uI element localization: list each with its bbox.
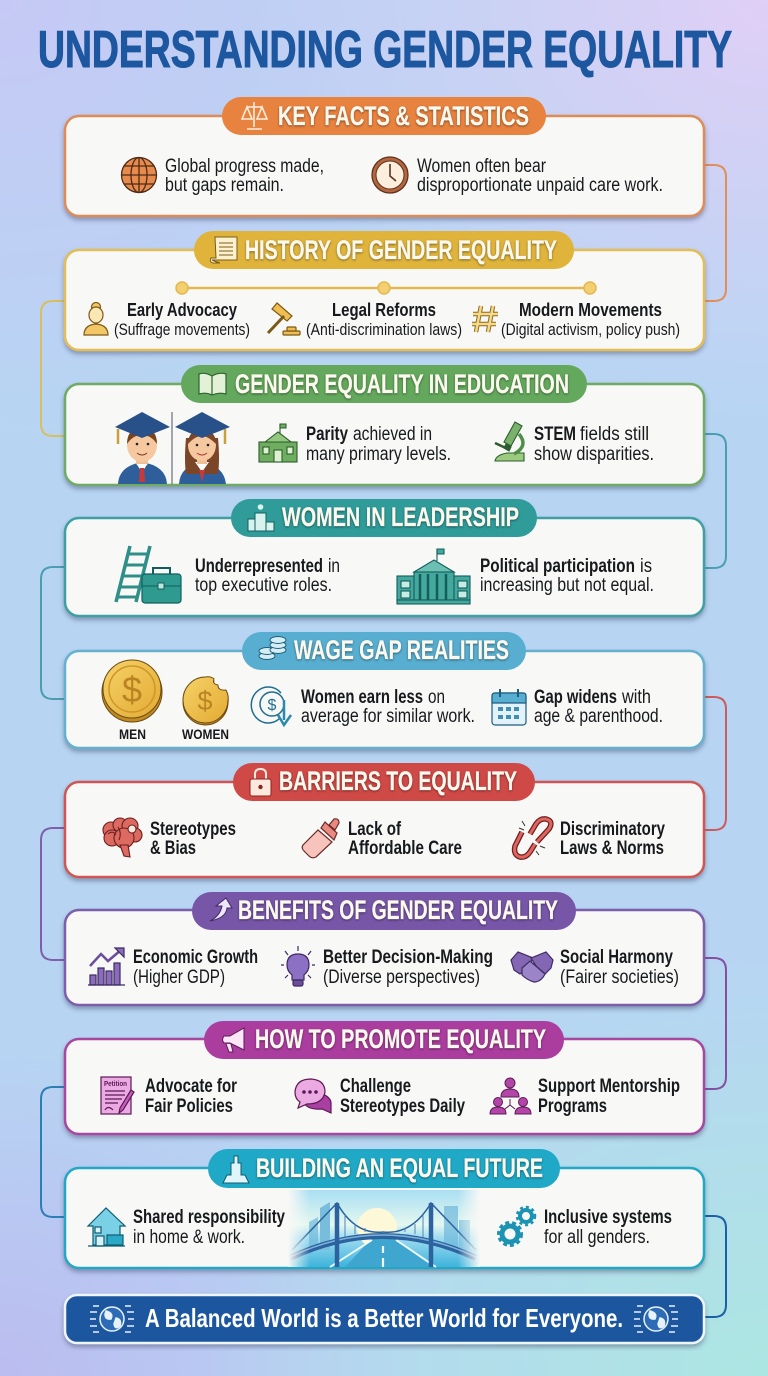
text: mentorship: Support Mentorship [538, 1076, 680, 1097]
heading pill: history: HISTORY OF GENDER EQUALITY [245, 235, 557, 265]
panel: barriers [65, 763, 704, 877]
text: mentorship [538, 1076, 680, 1117]
text: gap widens [534, 687, 663, 727]
text: challenge: Stereotypes Daily [340, 1096, 465, 1117]
text: women earn less: average for similar work. [301, 706, 475, 727]
heading pill: promote: HOW TO PROMOTE EQUALITY [255, 1024, 546, 1054]
text: gap widens: age & parenthood. [534, 706, 663, 727]
heading pill: key facts [222, 97, 546, 135]
text: legal reforms: (Anti-discrimination laws) [306, 320, 462, 339]
text: social harmony: (Fairer societies) [560, 967, 679, 988]
text: inclusive systems [544, 1207, 672, 1248]
text: discriminatory [560, 819, 665, 859]
text: inclusive systems: Inclusive systems [544, 1207, 672, 1228]
heading pill: benefits: BENEFITS OF GENDER EQUALITY [238, 895, 558, 925]
icon: calendar [492, 689, 526, 725]
text: parity: Parity [306, 424, 348, 445]
heading pill: barriers: BARRIERS TO EQUALITY [279, 766, 517, 796]
heading pill: benefits [192, 892, 576, 930]
text: political participation [480, 556, 654, 596]
icon: microscope [495, 422, 524, 461]
text: discriminatory: Laws & Norms [560, 838, 664, 859]
text: women earn less: on [428, 687, 445, 708]
text: lack of care [348, 819, 462, 859]
text: modern movements: Modern Movements [519, 299, 662, 320]
text: economic growth [133, 947, 258, 988]
icon: globe [122, 158, 156, 192]
text: stereotypes [150, 819, 236, 859]
icon: baby bottle [302, 819, 339, 858]
icon: school [259, 424, 297, 462]
text: challenge [340, 1076, 465, 1117]
text: advocate: Fair Policies [145, 1096, 233, 1117]
text: advocate [145, 1076, 237, 1117]
heading pill: education: GENDER EQUALITY IN EDUCATION [235, 369, 569, 399]
icon: women's bitten coin: $ [197, 686, 213, 716]
text: stereotypes: Stereotypes [150, 819, 236, 840]
panel: wage gap [65, 632, 704, 748]
icon: globe right [634, 1306, 678, 1332]
text: parity: achieved in [353, 424, 432, 445]
timeline [176, 282, 596, 294]
text: early advocacy: (Suffrage movements) [114, 320, 250, 339]
panel: future [65, 1149, 704, 1268]
text: political participation: Political participation [480, 556, 635, 577]
text: advocate: Advocate for [145, 1076, 237, 1097]
icon: falling dollar: $ [268, 697, 277, 714]
heading pill: promote [204, 1021, 564, 1059]
icon: brain [103, 818, 142, 857]
text: mentorship: Programs [538, 1096, 607, 1117]
text: progress: but gaps remain. [165, 175, 284, 196]
text: gap widens: with [621, 687, 651, 708]
label: men: MEN [119, 726, 146, 742]
icon: globe left [90, 1306, 134, 1332]
connectors between panels [41, 165, 726, 1317]
icon: lightbulb [281, 946, 315, 986]
icon: men's coin [102, 660, 162, 722]
icon: chat bubbles [295, 1079, 331, 1113]
text: shared responsibility [133, 1207, 285, 1248]
text: progress [165, 156, 324, 196]
text: underrepresented: top executive roles. [195, 575, 332, 596]
heading pill: history [194, 231, 574, 269]
text: economic growth: (Higher GDP) [133, 967, 225, 988]
text: closing message: A Balanced World is a Better World for Everyone. [145, 1303, 623, 1333]
text: unpaid care: Women often bear [417, 156, 547, 177]
heading pill: barriers [233, 763, 535, 801]
panel: key facts [65, 97, 704, 216]
icon: petition [101, 1077, 134, 1114]
icon: falling dollar [251, 687, 291, 725]
text: inclusive systems: for all genders. [544, 1227, 650, 1248]
text: better decisions: (Diverse perspectives) [323, 967, 480, 988]
heading pill: education [181, 365, 587, 403]
icon: mentorship [490, 1078, 531, 1114]
text: lack of care: Lack of [348, 819, 402, 840]
text: underrepresented: in [328, 556, 340, 577]
footer banner [65, 1295, 704, 1343]
heading pill: leadership [231, 499, 537, 537]
panel: education [65, 365, 704, 485]
icon: capitol [397, 549, 470, 604]
text: stereotypes: & Bias [150, 838, 196, 859]
icon: house [88, 1208, 125, 1246]
panel: history [65, 231, 704, 350]
text: early advocacy: Early Advocacy [127, 299, 238, 320]
icon: clock [372, 157, 408, 193]
icon: women's bitten coin [183, 677, 228, 725]
text: shared responsibility: Shared responsibility [133, 1207, 285, 1228]
text: social harmony: Social Harmony [560, 947, 673, 968]
text: challenge: Challenge [340, 1076, 411, 1097]
heading pill: wage gap [242, 632, 526, 670]
text: legal reforms [306, 299, 462, 339]
text: gap widens: Gap widens [534, 687, 617, 708]
text: political participation: increasing but not equal. [480, 575, 654, 596]
text: economic growth: Economic Growth [133, 947, 258, 968]
icon: gears [498, 1207, 535, 1246]
heading pill: wage gap: WAGE GAP REALITIES [294, 635, 509, 665]
text: legal reforms: Legal Reforms [332, 299, 436, 320]
icon: hashtag [472, 306, 498, 332]
heading pill: leadership: WOMEN IN LEADERSHIP [282, 502, 519, 532]
text: political participation: is [640, 556, 652, 577]
text: discriminatory: Discriminatory [560, 819, 665, 840]
illustration: bridge to the future [288, 1190, 480, 1267]
text: parity: many primary levels. [306, 444, 451, 465]
text: stem: fields still [580, 424, 649, 445]
text: unpaid care: disproportionate unpaid care work. [417, 175, 663, 196]
text: social harmony [560, 947, 679, 988]
heading pill: future [208, 1149, 560, 1188]
icon: handshake [511, 952, 553, 982]
text: stem: STEM [534, 424, 576, 445]
text: modern movements [501, 299, 680, 339]
icon: petition: Petition [104, 1081, 127, 1088]
heading pill: future: BUILDING AN EQUAL FUTURE [256, 1153, 543, 1183]
text: underrepresented: Underrepresented [195, 556, 323, 577]
text: better decisions: Better Decision-Making [323, 947, 493, 968]
text: early advocacy [114, 299, 250, 339]
icon: growth chart [88, 948, 125, 985]
icon: ladder and briefcase [116, 546, 181, 603]
panel: benefits [65, 892, 704, 1005]
text: women earn less [301, 687, 475, 727]
panel: promote [65, 1021, 704, 1134]
icon: broken chain [515, 819, 551, 857]
text: underrepresented [195, 556, 340, 596]
text: progress: Global progress made, [165, 156, 324, 177]
text: parity [306, 424, 451, 465]
text: stem: show disparities. [534, 444, 654, 465]
text: modern movements: (Digital activism, policy push) [501, 320, 680, 339]
icon: men's coin: $ [122, 669, 142, 710]
icon: suffragist [84, 302, 108, 335]
text: women earn less: Women earn less [301, 687, 423, 708]
panel: leadership [65, 499, 704, 616]
text: better decisions [323, 947, 493, 988]
heading pill: key facts: KEY FACTS & STATISTICS [278, 101, 529, 131]
text: unpaid care [417, 156, 663, 196]
text: lack of care: Affordable Care [348, 838, 462, 859]
text: shared responsibility: in home & work. [133, 1227, 245, 1248]
icon: gavel [268, 303, 300, 335]
label: women: WOMEN [182, 726, 229, 742]
illustration: graduates [115, 412, 230, 484]
text: stem [534, 424, 654, 465]
